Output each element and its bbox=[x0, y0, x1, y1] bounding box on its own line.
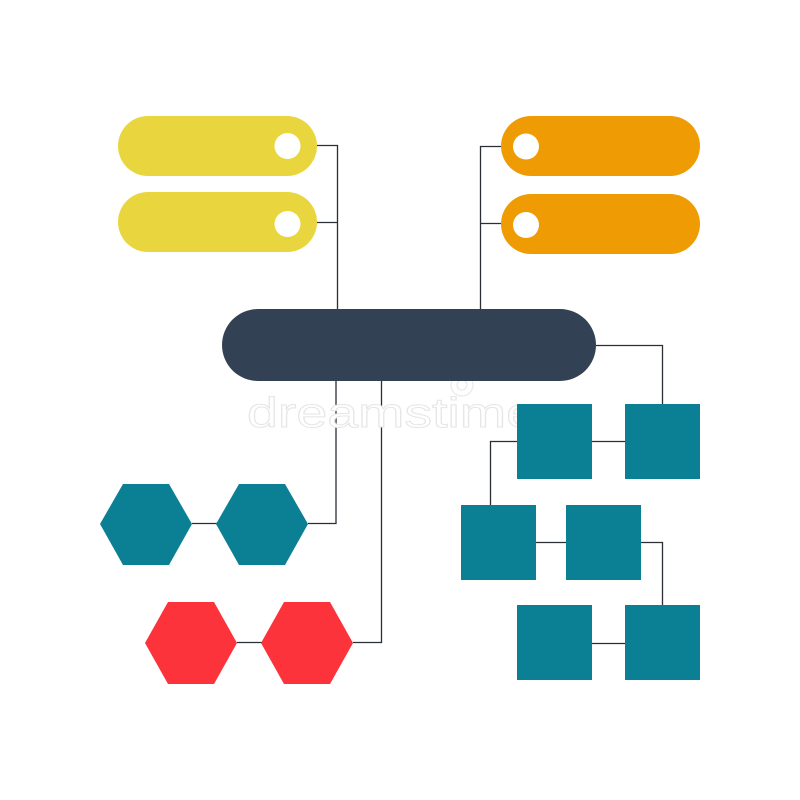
watermark: dreamstime bbox=[247, 389, 537, 436]
yellow pill top circle bbox=[274, 133, 300, 159]
connector lines bbox=[192, 146, 662, 644]
yellow pill top bbox=[118, 116, 317, 176]
teal squares bbox=[461, 404, 700, 680]
central navy pill bbox=[222, 309, 596, 381]
orange pill bottom bbox=[501, 194, 700, 254]
red hexagon right bbox=[261, 602, 353, 684]
yellow pill bottom bbox=[118, 192, 317, 252]
watermark bbox=[247, 374, 537, 436]
yellow pill bottom circle bbox=[274, 211, 300, 237]
orange pill top circle bbox=[513, 134, 539, 160]
teal hexagon left bbox=[100, 484, 192, 565]
teal hexagon right bbox=[216, 484, 308, 565]
red hexagon left bbox=[145, 602, 237, 684]
orange pill top bbox=[501, 116, 700, 176]
orange pill bottom circle bbox=[513, 212, 539, 238]
